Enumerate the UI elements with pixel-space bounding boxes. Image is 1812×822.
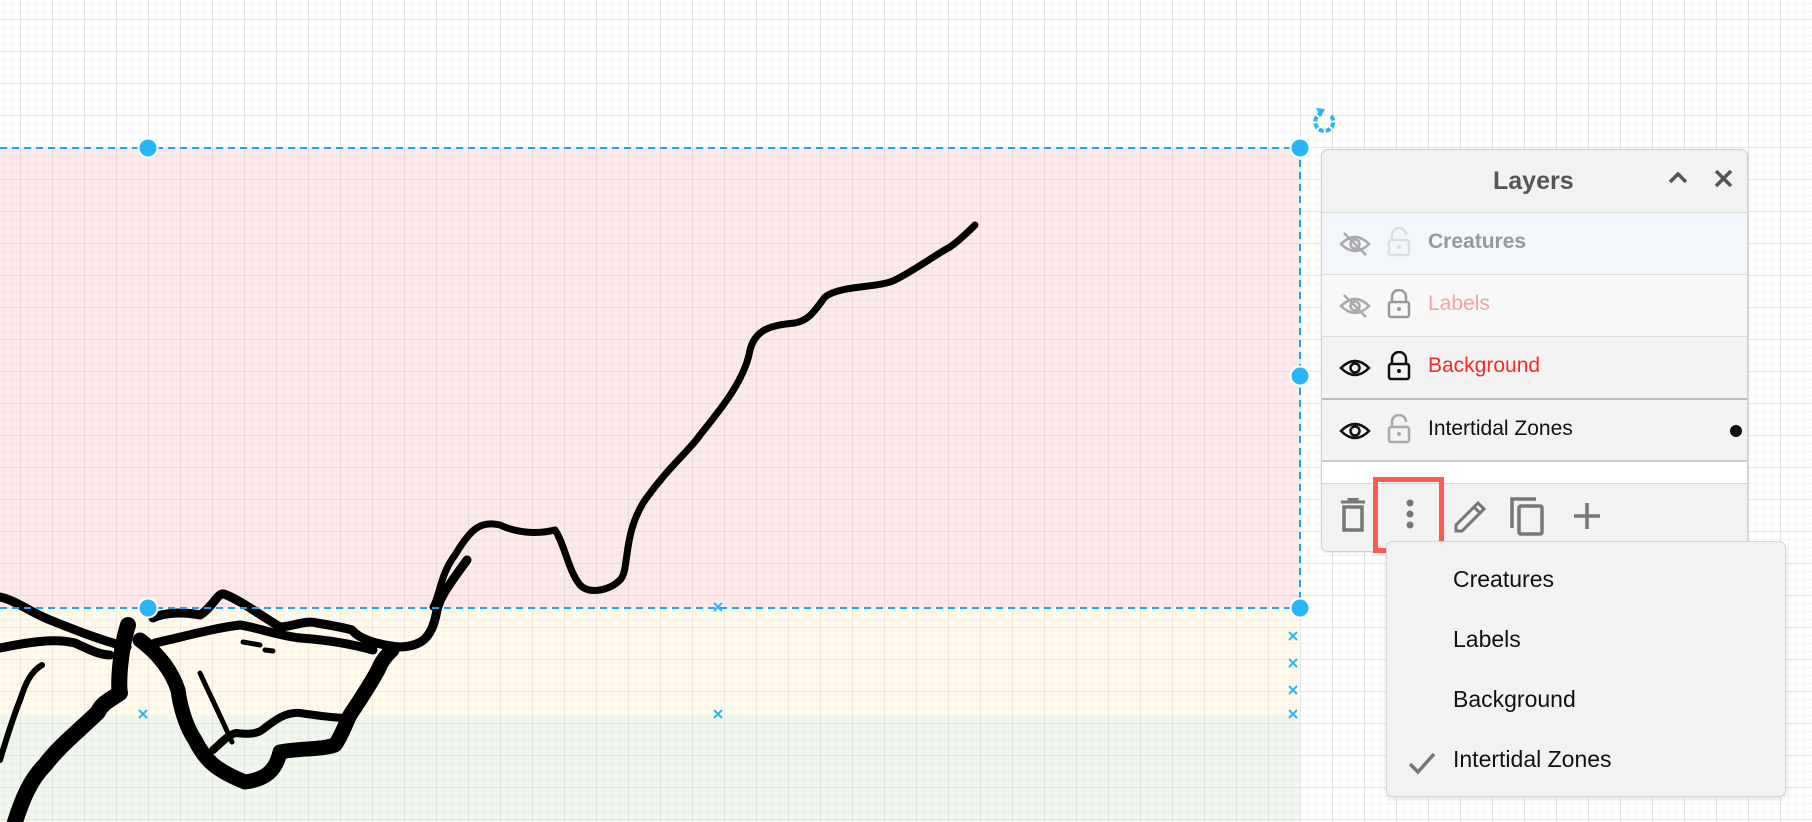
layer row: Labels: Labels (1428, 292, 1490, 315)
icon: duplicate (1510, 497, 1544, 536)
zone: yellow (0, 608, 1300, 716)
menu item: Background: Background (1453, 686, 1576, 712)
icon: collapse (1668, 172, 1688, 184)
dropdown menu (1386, 541, 1786, 797)
panel: Layers (1321, 149, 1748, 552)
icon: rotate handle (1315, 108, 1333, 131)
highlight: red box around more button (1373, 477, 1444, 553)
zone: pink (0, 148, 1300, 608)
toolbar (1322, 483, 1747, 554)
empty row (1322, 460, 1747, 485)
heading: Layers: Layers (1493, 167, 1574, 195)
layer row: Labels (1322, 274, 1747, 336)
layer row: Intertidal Zones: Intertidal Zones (1428, 417, 1573, 440)
layer row: Intertidal Zones (1322, 398, 1747, 461)
icon: close (1714, 170, 1732, 188)
layer row: Background: Background (1428, 354, 1540, 377)
menu item: Labels: Labels (1453, 626, 1521, 652)
icon: checkmark (1408, 752, 1436, 774)
zone: green (0, 716, 1300, 822)
layer row: Creatures: Creatures (1428, 230, 1526, 253)
menu item: Creatures: Creatures (1453, 566, 1554, 592)
icon: add (1574, 503, 1600, 529)
icon: more (dots) (1406, 500, 1414, 528)
layer row: Creatures (1322, 212, 1747, 274)
layer row: Background (1322, 336, 1747, 398)
heading: Layers (1493, 167, 1732, 195)
icon: pencil (1454, 501, 1486, 532)
menu item: Intertidal Zones (checked): Intertidal Zones (1453, 746, 1612, 772)
icon: trash (1341, 498, 1365, 532)
